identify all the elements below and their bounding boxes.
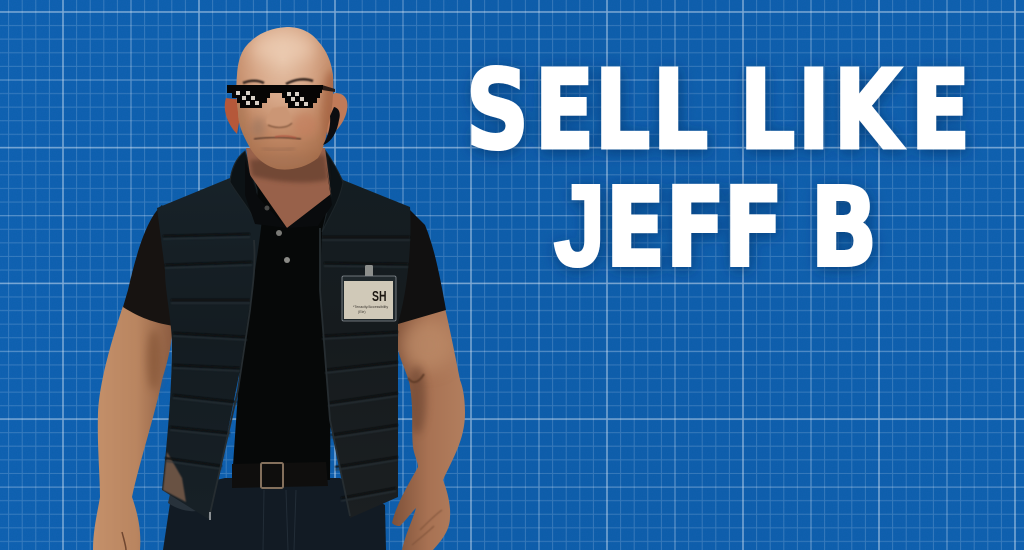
right ear [322,93,348,138]
vest right panel [320,150,410,518]
glasses arm [322,85,335,92]
jeans [163,478,386,550]
title: Sell Like Jeff B [466,48,971,292]
earbud [323,107,340,145]
neck and chest [246,148,331,228]
badge small print: (Ele) [358,310,366,314]
belt buckle [261,463,283,488]
vest left panel [157,151,262,520]
person figure [93,27,465,550]
left ear [225,98,243,134]
vest [157,150,410,520]
pixel sunglasses [227,85,335,108]
nose [267,106,288,124]
t-shirt [123,160,446,480]
face shading [236,29,334,151]
belt [232,462,328,488]
badge clip [365,265,373,284]
collar [230,150,343,232]
badge holder [342,276,396,321]
zippers [209,240,255,518]
left arm and hand [93,306,173,550]
mouth [254,138,301,139]
title line 1: SELL LIKE [466,48,971,175]
badge card [344,281,393,319]
head [236,27,333,170]
badge initials: SH [372,289,386,305]
badge small print: *Tenacity/Accessibility [353,305,388,309]
quilting lines [163,234,410,498]
glasses pixel highlights [236,91,308,106]
title line 2: JEFF B [554,162,877,292]
polo shirt collar and buttons [245,160,332,263]
name badge [342,265,396,321]
neck shadow [250,155,328,183]
right arm and hand [392,308,465,550]
eyebrows [243,79,313,84]
glasses frame [227,85,323,108]
vest hem reflection [163,452,186,502]
